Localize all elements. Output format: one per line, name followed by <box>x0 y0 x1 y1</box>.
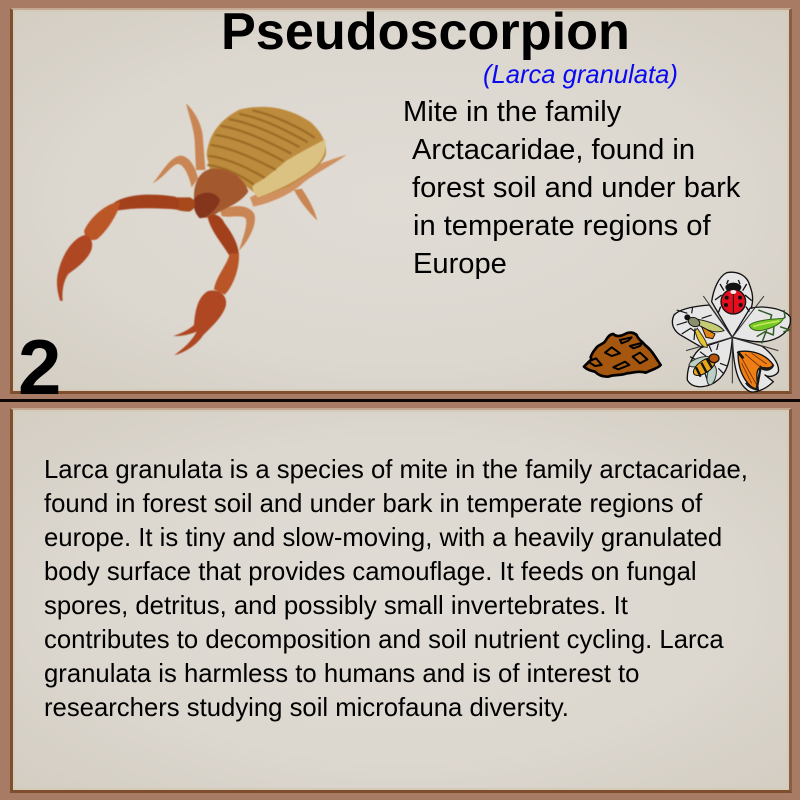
short description: Arctacaridae, found in <box>412 134 695 166</box>
ladybug <box>715 280 752 314</box>
back legs <box>153 103 347 251</box>
cephalothorax <box>194 168 248 218</box>
mantis <box>749 310 790 343</box>
hoverfly <box>677 307 724 347</box>
abdomen <box>207 107 326 197</box>
short description: Europe <box>413 248 507 280</box>
illustration: pseudoscorpion <box>56 103 346 356</box>
divider line <box>0 399 800 402</box>
long description <box>44 456 748 722</box>
title: Pseudoscorpion <box>221 3 630 61</box>
abdomen ridges <box>208 111 314 184</box>
left pedipalp <box>173 197 195 211</box>
long description: europe. It is tiny and slow-moving, with a heavily granulated <box>44 524 722 552</box>
icon group: soil and insect wheel <box>582 272 792 393</box>
icon: soil pile <box>584 333 661 377</box>
wheel spokes <box>686 296 778 383</box>
long description: researchers studying soil microfauna diversity. <box>44 694 569 722</box>
icon: insect wheel <box>672 272 790 392</box>
panel: top card <box>0 0 800 399</box>
wasp <box>688 343 727 386</box>
card number: 2 <box>18 323 61 411</box>
long description: body surface that provides camouflage. It feeds on fungal <box>44 558 697 586</box>
short description: in temperate regions of <box>413 210 711 242</box>
long description: found in forest soil and under bark in temperate regions of <box>44 490 702 518</box>
long description: granulata is harmless to humans and is of interest to <box>44 660 639 688</box>
short description <box>403 96 740 280</box>
long description: contributes to decomposition and soil nutrient cycling. Larca <box>44 626 724 654</box>
short description: Mite in the family <box>403 96 621 128</box>
butterfly <box>738 351 773 390</box>
wheel petals <box>672 272 790 392</box>
scientific name: (Larca granulata) <box>483 61 678 89</box>
long description: Larca granulata is a species of mite in the family arctacaridae, <box>44 456 748 484</box>
panel: bottom card <box>0 402 800 800</box>
short description: forest soil and under bark <box>412 172 740 204</box>
long description: spores, detritus, and possibly small invertebrates. It <box>44 592 628 620</box>
right pedipalp <box>208 215 239 258</box>
